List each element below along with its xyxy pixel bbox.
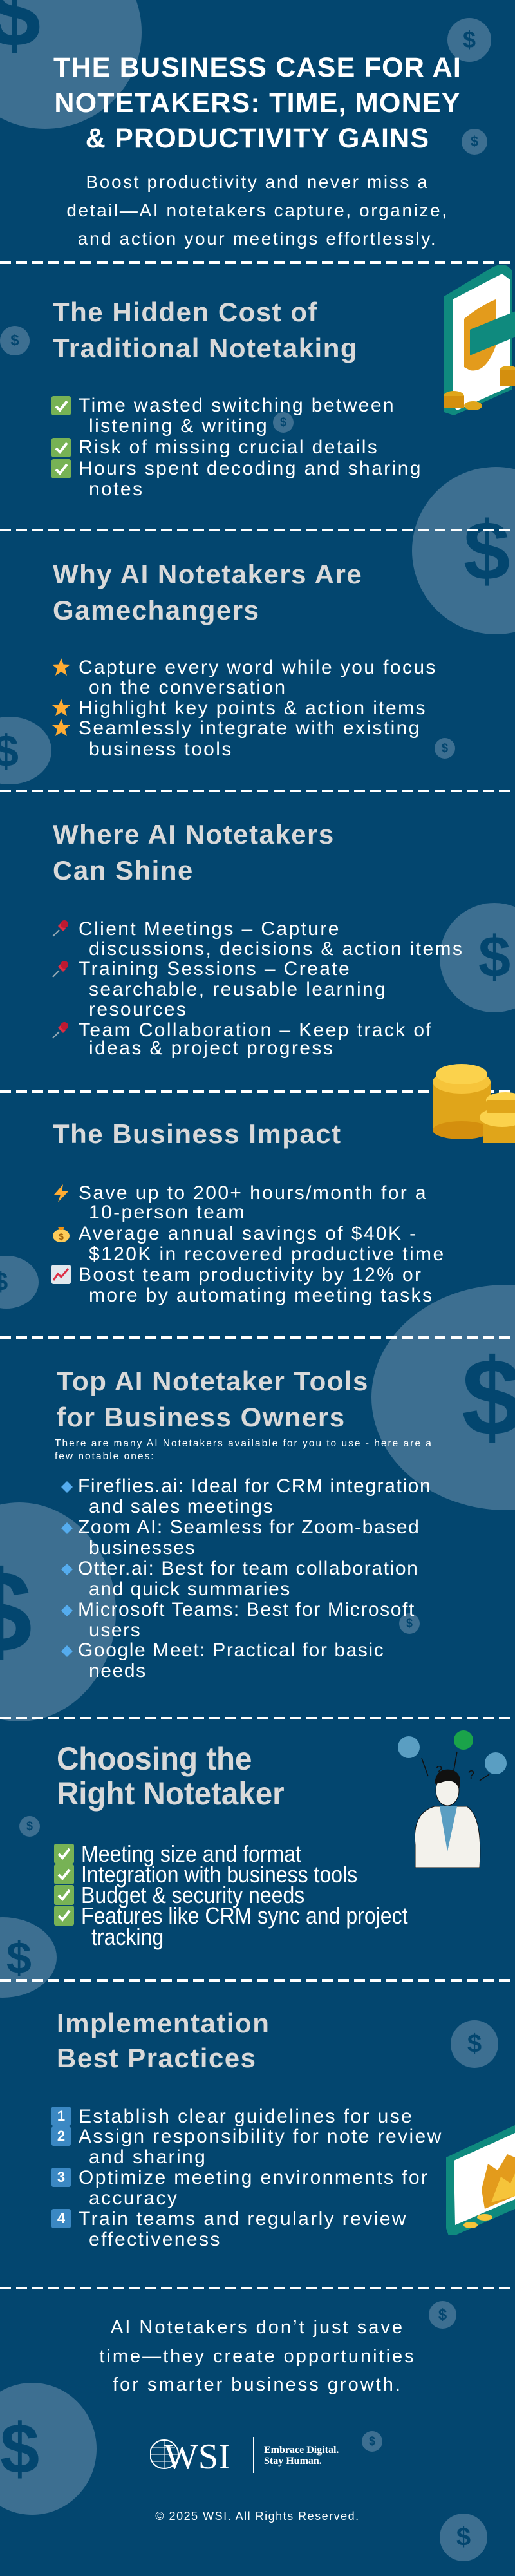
- closing statement: time—they create opportunities: [99, 2345, 416, 2366]
- list: 2: [57, 2128, 65, 2144]
- heading: Can Shine: [53, 855, 194, 886]
- decorative background coins: $: [10, 332, 19, 349]
- panel: where AI shines: [52, 819, 464, 1059]
- heading: Why AI Notetakers Are: [53, 559, 362, 589]
- list: Microsoft Teams: Best for Microsoft: [78, 1599, 415, 1620]
- list: Assign responsibility for note review: [79, 2126, 443, 2147]
- heading: The Business Impact: [53, 1119, 342, 1149]
- list: on the conversation: [89, 677, 286, 698]
- decorative background coins: $: [26, 1820, 33, 1833]
- list: and quick summaries: [89, 1578, 291, 1600]
- panel: hidden cost: [52, 297, 422, 500]
- list: Optimize meeting environments for: [79, 2167, 429, 2188]
- decorative background coins: $: [467, 2030, 482, 2058]
- list: resources: [89, 999, 187, 1020]
- list: businesses: [89, 1537, 196, 1558]
- heading: Right Notetaker: [57, 1776, 285, 1812]
- panel: business impact: [52, 1119, 445, 1306]
- decorative background coins: $: [442, 742, 448, 755]
- list: Training Sessions – Create: [79, 958, 351, 980]
- illustration: chart monitor: [446, 2125, 515, 2235]
- list: tracking: [91, 1924, 164, 1950]
- list: [54, 1841, 408, 1950]
- list: Team Collaboration – Keep track of: [79, 1019, 433, 1041]
- heading: [57, 1366, 369, 1432]
- closing statement: [99, 2317, 416, 2395]
- decorative background coins: $: [464, 504, 510, 598]
- illustration: phone with shield and coins: [444, 265, 515, 415]
- closing statement: for smarter business growth.: [113, 2374, 402, 2395]
- heading: [53, 297, 358, 363]
- list: [52, 1182, 445, 1306]
- panel: top tools: [55, 1366, 433, 1681]
- intro text: [55, 1438, 433, 1462]
- decorative background coins: $: [478, 925, 510, 989]
- decorative background coins: $: [406, 1616, 413, 1629]
- list: 4: [57, 2210, 65, 2226]
- list: $120K in recovered productive time: [89, 1244, 445, 1265]
- list: discussions, decisions & action items: [89, 938, 464, 960]
- decorative background coins: $: [438, 2306, 447, 2324]
- copyright: © 2025 WSI. All Rights Reserved.: [155, 2510, 360, 2523]
- list: [52, 2106, 443, 2250]
- decorative background coins: $: [280, 416, 286, 429]
- list: [52, 395, 422, 500]
- list: Features like CRM sync and project: [81, 1902, 407, 1929]
- heading: [57, 1741, 285, 1812]
- list: Train teams and regularly review: [79, 2208, 407, 2230]
- title: [53, 52, 462, 154]
- subtitle: detail—AI notetakers capture, organize,: [66, 200, 449, 220]
- decorative background coins: $: [369, 2434, 375, 2447]
- subtitle: and action your meetings effortlessly.: [78, 229, 437, 249]
- heading: Top AI Notetaker Tools: [57, 1366, 369, 1396]
- list: notes: [89, 478, 144, 500]
- list: business tools: [89, 739, 233, 760]
- list: Hours spent decoding and sharing: [79, 458, 422, 479]
- illustration: gold coins: [433, 1064, 515, 1143]
- list: Google Meet: Practical for basic: [78, 1640, 384, 1661]
- list: 1: [57, 2108, 65, 2124]
- subtitle: Boost productivity and never miss a: [86, 172, 429, 192]
- intro text: There are many AI Notetakers available for you to use - here are a: [55, 1438, 433, 1449]
- list: listening & writing: [89, 415, 268, 437]
- logo: WSI: [150, 2437, 339, 2474]
- list: Otter.ai: Best for team collaboration: [78, 1558, 418, 1579]
- decorative background coins: $: [0, 2409, 39, 2488]
- list: Save up to 200+ hours/month for a: [79, 1182, 427, 1204]
- list: and sales meetings: [89, 1496, 274, 1517]
- logo: WSI: Embrace Digital.: [264, 2445, 339, 2456]
- list: more by automating meeting tasks: [89, 1285, 433, 1306]
- decorative background coins: $: [6, 1932, 32, 1982]
- heading: Traditional Notetaking: [53, 333, 358, 363]
- list: Average annual savings of $40K -: [79, 1223, 418, 1244]
- heading: Best Practices: [57, 2043, 257, 2073]
- list: ideas & project progress: [89, 1037, 334, 1059]
- logo: WSI: Stay Human.: [264, 2456, 322, 2467]
- panel: choosing notetaker: [54, 1741, 408, 1950]
- heading: [53, 559, 362, 625]
- list: Establish clear guidelines for use: [79, 2106, 413, 2127]
- header: [53, 52, 462, 249]
- list: [52, 657, 437, 760]
- list: needs: [89, 1660, 147, 1681]
- list: accuracy: [89, 2188, 178, 2209]
- list: Client Meetings – Capture: [79, 918, 341, 940]
- list: Risk of missing crucial details: [79, 437, 379, 458]
- heading: Choosing the: [57, 1741, 252, 1777]
- decorative background coins: $: [463, 26, 476, 53]
- list: 3: [57, 2169, 65, 2185]
- intro text: few notable ones:: [55, 1451, 155, 1462]
- illustration: thinking person: ?: [468, 1768, 474, 1781]
- list: Highlight key points & action items: [79, 697, 427, 719]
- heading: [53, 819, 335, 886]
- panel: why gamechangers: [52, 559, 437, 760]
- closing statement: AI Notetakers don’t just save: [111, 2317, 404, 2338]
- heading: for Business Owners: [57, 1402, 346, 1432]
- heading: The Hidden Cost of: [53, 297, 318, 327]
- title: NOTETAKERS: TIME, MONEY: [54, 88, 461, 118]
- list: [52, 918, 464, 1059]
- list: effectiveness: [89, 2229, 221, 2250]
- heading: Gamechangers: [53, 595, 259, 625]
- list: $: [59, 1231, 64, 1242]
- list: searchable, reusable learning: [89, 979, 387, 1000]
- list: Seamlessly integrate with existing: [79, 717, 421, 739]
- list: Zoom AI: Seamless for Zoom-based: [78, 1517, 420, 1538]
- list: Fireflies.ai: Ideal for CRM integration: [78, 1475, 431, 1497]
- subtitle: [66, 172, 449, 249]
- heading: Where AI Notetakers: [53, 819, 335, 849]
- list: Capture every word while you focus: [79, 657, 437, 678]
- list: Integration with business tools: [81, 1861, 357, 1888]
- list: and sharing: [89, 2146, 207, 2168]
- decorative background coins: $: [456, 2523, 471, 2552]
- list: Budget & security needs: [81, 1882, 304, 1908]
- heading: Implementation: [57, 2008, 270, 2038]
- list: Time wasted switching between: [79, 395, 395, 416]
- list: Meeting size and format: [81, 1841, 301, 1867]
- list: [61, 1475, 431, 1681]
- title: THE BUSINESS CASE FOR AI: [53, 52, 462, 83]
- panel: implementation: [52, 2008, 443, 2250]
- illustration: thinking person: [398, 1730, 507, 1868]
- illustration: thinking person: ?: [436, 1764, 442, 1777]
- list: Boost team productivity by 12% or: [79, 1264, 422, 1285]
- decorative background coins: $: [471, 133, 478, 149]
- list: 10-person team: [89, 1202, 246, 1223]
- heading: [57, 2008, 270, 2073]
- list: users: [89, 1620, 141, 1641]
- title: & PRODUCTIVITY GAINS: [86, 123, 429, 154]
